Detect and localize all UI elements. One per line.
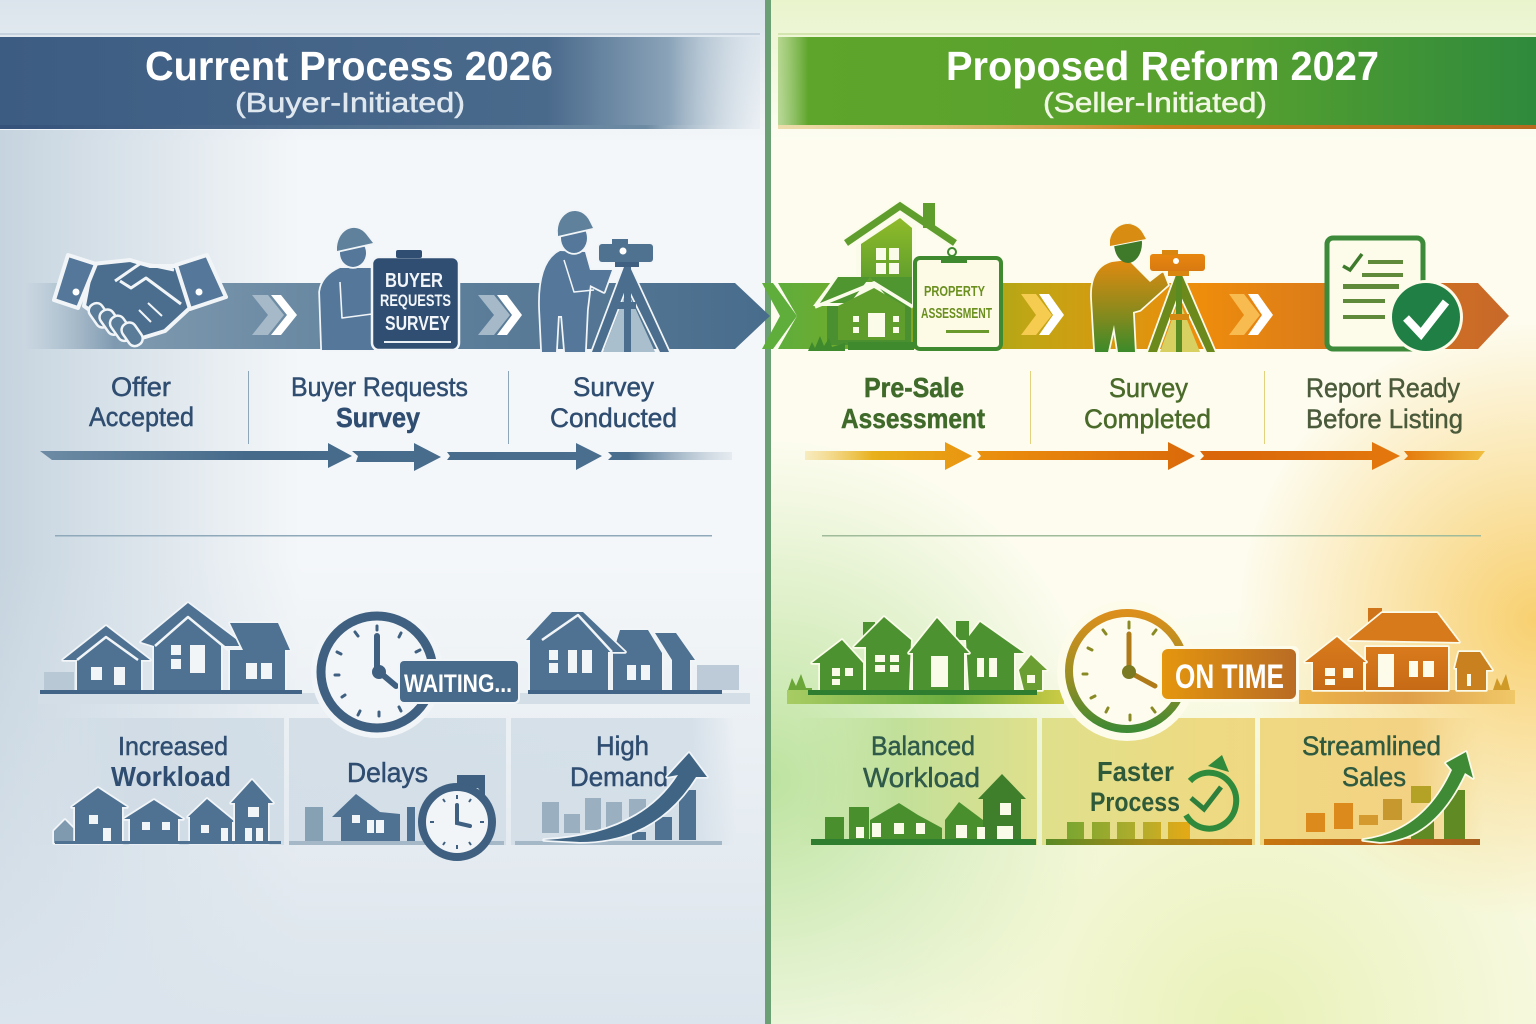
- clipboard: buyer requests survey: [372, 250, 459, 350]
- panel text: high demand: Demand: [570, 762, 668, 792]
- orange houses: [1299, 608, 1515, 704]
- center divider: [765, 0, 771, 1024]
- label: report ready before listing: Report Ready: [1306, 373, 1460, 403]
- icon: waiting clock: [311, 606, 520, 738]
- right subtitle: (Seller-Initiated): [1043, 87, 1267, 118]
- clipboard: buyer requests survey: BUYER: [385, 270, 443, 292]
- label: buyer requests survey: [291, 372, 468, 433]
- left house group A: [40, 603, 302, 694]
- label: report ready before listing: [1306, 373, 1463, 434]
- left house group B: [526, 612, 739, 694]
- timeline arrows: current: [40, 443, 732, 471]
- panel text: balanced workload: Balanced: [871, 731, 975, 761]
- bar chart with rising arrow: high demand: [515, 753, 722, 845]
- panel: balanced workload: [800, 718, 1037, 845]
- clipboard: buyer requests survey: SURVEY: [385, 313, 451, 335]
- bars: faster process: [1046, 822, 1252, 845]
- green houses: [787, 617, 1064, 704]
- step labels: current: [89, 372, 677, 433]
- step labels: reform: [841, 372, 1463, 434]
- left header banner: [0, 33, 760, 129]
- icon: on-time clock: [1057, 601, 1299, 741]
- panel text: increased workload: Workload: [111, 761, 231, 792]
- label: offer accepted: Accepted: [89, 402, 194, 432]
- icon: house with clipboard: [808, 203, 1001, 351]
- right band start chevron: [762, 283, 797, 349]
- mini houses: balanced: [811, 774, 1036, 845]
- label: survey conducted: Conducted: [550, 403, 677, 433]
- label: pre-sale assessment: Assessment: [841, 403, 985, 434]
- bar chart with rising arrow: streamlined sales: [1264, 752, 1480, 845]
- panel text: increased workload: [111, 731, 231, 792]
- clipboard: property assessment: [915, 248, 1001, 349]
- icon: check cycle: [1186, 755, 1236, 829]
- panel text: increased workload: Increased: [118, 731, 228, 761]
- left panel: delays: [289, 718, 506, 845]
- left chevrons 2: [478, 295, 522, 335]
- badge: on time: ON TIME: [1175, 658, 1284, 696]
- panel text: high demand: High: [596, 731, 649, 761]
- clipboard: property assessment: ASSESSMENT: [921, 305, 992, 322]
- upper and lower house: [808, 203, 955, 351]
- panel: streamlined sales: [1260, 718, 1484, 845]
- panel text: balanced workload: [863, 731, 980, 793]
- right chevrons 2: [1229, 294, 1273, 335]
- timeline arrows: reform: [805, 442, 1485, 470]
- label: report ready before listing: Before Listing: [1306, 404, 1463, 434]
- label: pre-sale assessment: Pre-Sale: [864, 372, 964, 403]
- left background: [0, 0, 768, 1024]
- icon: handshake: [54, 255, 226, 349]
- left subtitle: (Buyer-Initiated): [235, 87, 465, 118]
- left title: Current Process 2026: [145, 43, 553, 89]
- right header banner: [778, 33, 1536, 129]
- panel text: faster process: Process: [1090, 787, 1180, 817]
- label: survey completed: Completed: [1084, 404, 1211, 434]
- right chevrons 1: [1021, 294, 1064, 335]
- label: buyer requests survey: Buyer Requests: [291, 372, 468, 402]
- label: survey completed: [1084, 373, 1211, 434]
- left process band arrow: [25, 283, 770, 349]
- label: offer accepted: Offer: [111, 372, 171, 402]
- left panel: increased workload: [30, 718, 284, 845]
- label: pre-sale assessment: [841, 372, 985, 434]
- person: [320, 228, 374, 350]
- panel: faster process: [1042, 718, 1255, 845]
- label: survey completed: Survey: [1109, 373, 1188, 403]
- left panel: high demand: [511, 718, 736, 845]
- label: buyer requests survey: Survey: [336, 402, 420, 433]
- panel text: streamlined sales: Streamlined: [1302, 731, 1441, 761]
- icon: stopwatch: [422, 775, 492, 857]
- label: offer accepted: [89, 372, 194, 432]
- mini houses: delays: [289, 794, 504, 845]
- mini houses: workload: [54, 780, 281, 844]
- icon: surveyor with tripod (reform): [1092, 223, 1215, 352]
- clipboard: buyer requests survey: REQUESTS: [380, 291, 451, 310]
- icon: surveyor with tripod: [540, 211, 669, 352]
- right panels row: [800, 718, 1484, 845]
- label: survey conducted: [550, 372, 677, 433]
- right process band arrow: [778, 283, 1509, 349]
- icon: report with check badge: [1327, 238, 1463, 354]
- panel text: streamlined sales: Sales: [1342, 762, 1406, 792]
- panel text: faster process: [1090, 756, 1180, 817]
- badge: on time: [1159, 646, 1299, 702]
- clipboard: property assessment: PROPERTY: [924, 283, 985, 300]
- right background: [768, 0, 1536, 1024]
- panel text: faster process: Faster: [1097, 756, 1174, 787]
- left chevrons 1: [252, 295, 297, 335]
- badge: waiting: WAITING...: [404, 670, 512, 698]
- badge: waiting: [398, 659, 520, 704]
- label: survey conducted: Survey: [573, 372, 654, 402]
- panel text: streamlined sales: [1302, 731, 1441, 792]
- panel text: high demand: [570, 731, 668, 792]
- left houses backdrop strip: [38, 693, 750, 704]
- panel text: delays: Delays: [347, 757, 428, 788]
- panel text: balanced workload: Workload: [863, 762, 980, 793]
- right title: Proposed Reform 2027: [946, 43, 1379, 89]
- icon: buyer with clipboard: [320, 228, 459, 350]
